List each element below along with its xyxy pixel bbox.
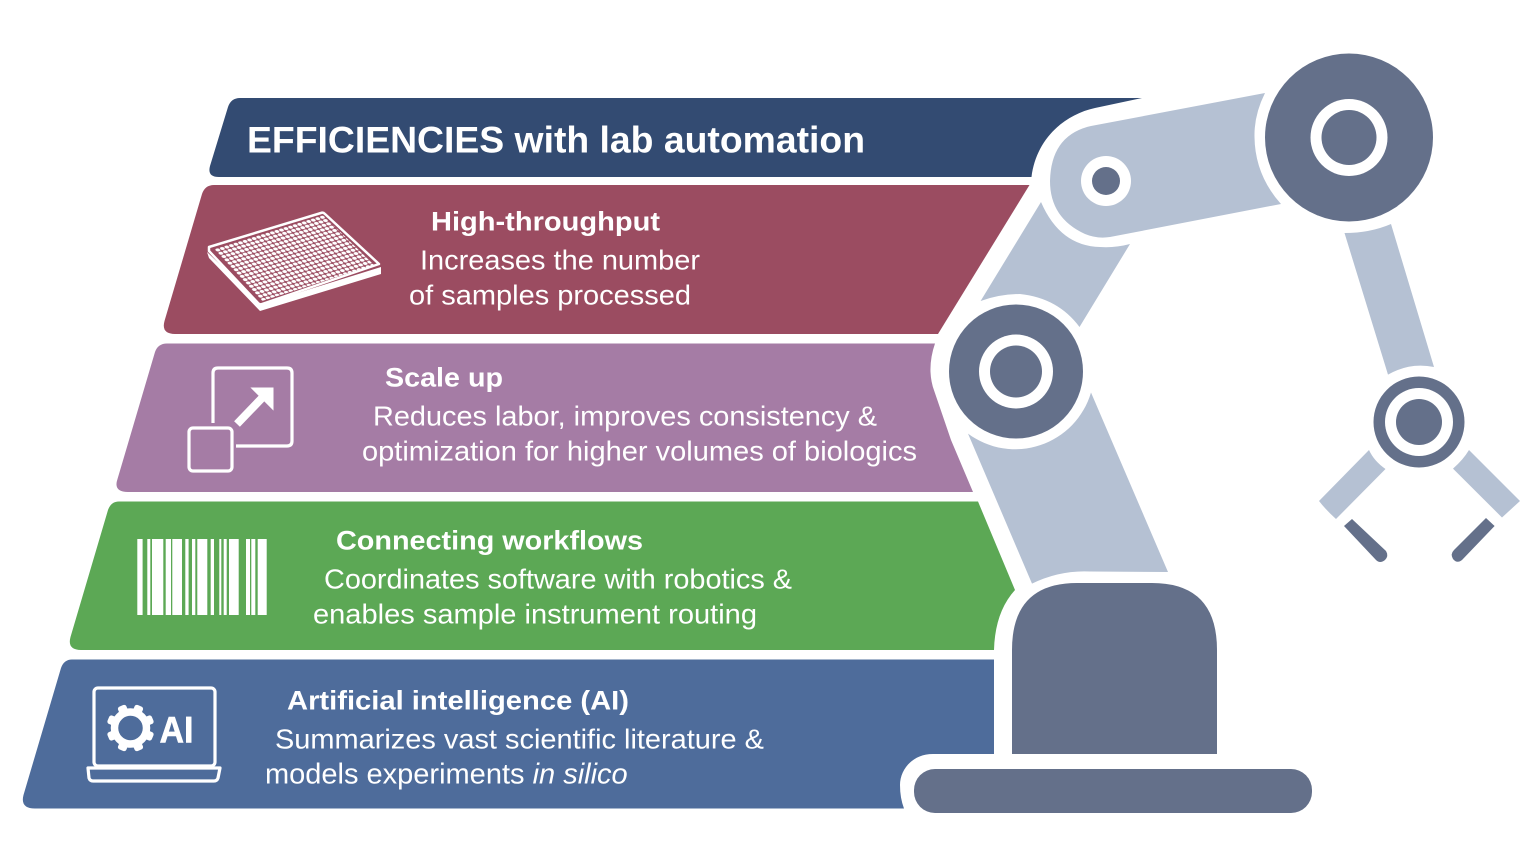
text: high-throughput [409, 206, 700, 310]
panel: high-throughput [164, 185, 1030, 334]
arm: lower link [968, 392, 1168, 584]
text: connecting workflows: Coordinates software with robotics & [324, 564, 792, 594]
icon: gear [107, 704, 154, 752]
gripper: left jaw [1319, 450, 1386, 519]
panel: artificial intelligence [23, 660, 994, 808]
heading: efficiencies: EFFICIENCIES with lab automation [247, 118, 865, 160]
panel: header band [209, 98, 1142, 177]
text: high-throughput: Increases the number [420, 244, 700, 276]
text: artificial intelligence: Summarizes vast scientific literature & [275, 724, 764, 754]
text: artificial intelligence: models experiments in silico [265, 758, 628, 790]
joint: elbow pin [1081, 156, 1131, 206]
gripper: right jaw [1453, 450, 1520, 518]
arm: wrist link [1344, 224, 1434, 375]
icon: barcode [137, 539, 267, 615]
gripper: right finger [1452, 518, 1495, 562]
base: plinth [914, 769, 1312, 813]
arm: upper link [981, 202, 1130, 327]
text: high-throughput: High-throughput [431, 206, 660, 236]
arm: top link [1050, 93, 1281, 238]
text: scale up: optimization for higher volumes of biologics [362, 436, 917, 466]
text: scale up: Reduces labor, improves consistency & [373, 400, 877, 432]
base: tower [1012, 583, 1217, 754]
text: artificial intelligence: Artificial intelligence (AI) [287, 686, 629, 716]
text: connecting workflows: enables sample instrument routing [313, 598, 757, 630]
text: connecting workflows [313, 526, 792, 630]
text: scale up [362, 362, 917, 466]
gripper: left finger [1344, 519, 1387, 562]
joint: middle [949, 304, 1083, 438]
text: artificial intelligence [265, 686, 764, 790]
robot arm [914, 54, 1520, 813]
text: connecting workflows: Connecting workflows [336, 526, 643, 556]
panel: scale up [116, 344, 973, 492]
icon: scale up arrow [189, 368, 292, 471]
joint: wrist [1374, 376, 1464, 468]
icon label: AI: AI [160, 710, 194, 750]
icon: well plate [207, 213, 381, 311]
panel: connecting workflows [70, 502, 1015, 650]
joint: shoulder [1265, 54, 1433, 222]
text: scale up: Scale up [385, 362, 503, 392]
icon: AI laptop [88, 688, 220, 781]
text: high-throughput: of samples processed [409, 280, 691, 310]
